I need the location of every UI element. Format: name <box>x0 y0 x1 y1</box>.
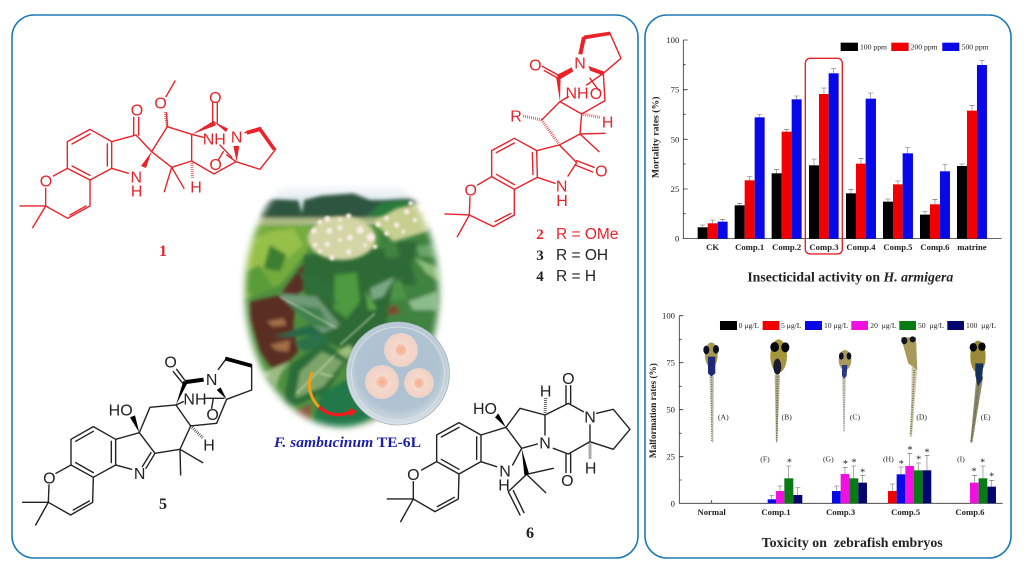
panel letters: (H) <box>883 454 894 463</box>
molecule: compound 6: O <box>561 473 574 490</box>
molecule: compound 5: H <box>203 438 215 455</box>
molecule: compounds 2 to 4: O <box>529 58 542 75</box>
bars: 100 ppm <box>698 165 967 239</box>
caption: strain name: F. sambucinum TE-6L <box>273 435 421 451</box>
significance asterisks: * <box>971 466 976 477</box>
legend: concentrations: 100 ppm <box>860 43 887 52</box>
legend: R group definitions: R = H <box>556 268 596 285</box>
molecule: compounds 2 to 4: H <box>602 115 613 132</box>
molecule: compound 5 <box>23 355 252 525</box>
bars: compound 1 <box>768 478 802 503</box>
category labels: Comp.3 <box>826 507 856 517</box>
embryo A <box>703 342 719 443</box>
y tick labels: 50 <box>666 405 675 415</box>
panel letters: (G) <box>823 454 834 463</box>
molecule: compounds 2 to 4 <box>445 32 621 237</box>
molecule: compound 1: N <box>131 169 142 186</box>
y tick labels <box>666 35 679 244</box>
molecule: compound 1: O <box>40 173 52 190</box>
legend: concentrations: 5 μg/L <box>781 321 802 330</box>
photo: tobacco field oval <box>233 185 453 438</box>
embryo E <box>970 341 986 443</box>
molecule: compound 1: H <box>131 184 142 201</box>
y tick labels: 75 <box>671 85 679 95</box>
molecule: compound 1: N <box>231 129 242 146</box>
significance asterisks <box>787 445 994 483</box>
legend: concentrations <box>841 43 989 52</box>
panel letters: (I) <box>957 454 965 463</box>
category labels: Normal <box>697 507 726 517</box>
category labels: Comp.6 <box>920 242 950 252</box>
molecule: compound 6: HO <box>473 401 497 418</box>
leaf veins <box>280 297 375 393</box>
molecule: compound 1: O <box>209 157 222 174</box>
chart title: Insecticidal activity on H. armigera <box>747 270 953 285</box>
y tick labels: 25 <box>671 184 679 194</box>
category labels: Comp.2 <box>772 242 801 252</box>
significance asterisks: * <box>851 457 856 468</box>
label: compound 6: 6 <box>526 525 534 542</box>
panel letters: (F) <box>760 454 770 463</box>
y tick labels: 0 <box>675 234 679 244</box>
axes and y ticks <box>679 316 1003 503</box>
zebrafish embryo images <box>703 336 986 443</box>
legend: R group definitions: R = OH <box>556 247 608 264</box>
molecule: compounds 2 to 4: R <box>510 109 522 126</box>
y tick labels: 0 <box>671 498 675 508</box>
molecule: compound 1: H <box>190 180 202 197</box>
molecule: compound 5: O <box>43 470 56 487</box>
category labels <box>706 242 987 252</box>
legend: R group definitions: 4 <box>536 269 544 285</box>
legend: R group definitions: R = OMe <box>556 226 618 243</box>
molecule: compound 6: N <box>499 464 511 481</box>
bars: compound 5 <box>888 466 931 503</box>
chart title: Toxicity on zebrafish embryos <box>762 536 943 551</box>
molecule: compound 6: O <box>562 371 575 388</box>
category labels <box>697 507 985 517</box>
molecule: compound 1: NH <box>203 132 226 149</box>
category labels: Comp.3 <box>809 242 839 252</box>
category labels: Comp.1 <box>735 242 764 252</box>
significance asterisks: * <box>899 459 904 470</box>
label: compound 5: 5 <box>159 496 167 513</box>
molecule: compound 5: O <box>164 355 177 372</box>
legend: concentrations: 0 μg/L <box>739 321 759 330</box>
significance asterisks: * <box>989 472 994 483</box>
molecule: compound 5: N <box>206 372 217 389</box>
legend: concentrations: 50 μg/L <box>918 321 945 330</box>
highlight box: compound 3 <box>805 58 842 254</box>
significance asterisks: * <box>860 467 865 478</box>
legend: R group definitions <box>536 226 618 285</box>
molecule: compound 1: O <box>154 95 167 112</box>
molecule: compound 1 <box>20 81 276 228</box>
legend: concentrations: 100 μg/L <box>966 321 996 330</box>
molecule: compound 5: N <box>134 466 145 483</box>
molecule: compound 1: O <box>209 90 222 107</box>
significance asterisks: * <box>843 459 848 470</box>
panel: bioactivity charts <box>645 15 1011 558</box>
molecule: compound 6: H <box>585 460 596 477</box>
panel letters <box>718 412 991 463</box>
flower specks <box>311 201 429 260</box>
legend: concentrations <box>720 321 996 330</box>
panel letters: (A) <box>718 412 729 421</box>
bars: 200 ppm <box>708 94 977 239</box>
panel letters: (E) <box>981 412 991 421</box>
molecule: compound 6 <box>387 371 630 522</box>
panel letters: (C) <box>850 412 861 421</box>
significance asterisks: * <box>787 457 792 468</box>
y axis title: Mortality rates (%) <box>650 96 661 178</box>
y tick labels: 25 <box>666 452 675 462</box>
molecule: compounds 2 to 4: O <box>595 164 608 181</box>
legend: concentrations: 20 μg/L <box>870 321 897 330</box>
category labels: Comp.5 <box>891 507 921 517</box>
embryo C <box>839 350 851 432</box>
legend: R group definitions: 2 <box>536 227 544 243</box>
error bars <box>700 60 985 227</box>
label: compound 1: 1 <box>159 243 167 260</box>
molecule: compound 6: H <box>540 384 551 401</box>
photo: petri dish with three colonies <box>346 322 450 425</box>
category labels: matrine <box>957 242 987 252</box>
legend: R group definitions: 3 <box>536 248 544 264</box>
axes and y ticks <box>683 40 1002 239</box>
molecule: compounds 2 to 4: O <box>464 183 477 200</box>
significance asterisks: * <box>907 445 912 456</box>
category labels: Comp.5 <box>883 242 913 252</box>
panel: compounds and source organism <box>12 15 638 558</box>
molecule: compound 1: O <box>131 102 143 119</box>
embryo B <box>770 339 789 443</box>
bars: compound 6 <box>970 478 996 503</box>
legend: concentrations: 500 ppm <box>962 43 989 52</box>
arrow: from plant to fungal culture <box>309 373 357 417</box>
molecule: compound 6: N <box>539 436 551 453</box>
legend: concentrations: 200 ppm <box>911 43 938 52</box>
legend: concentrations: 10 μg/L <box>824 321 849 330</box>
molecule: compounds 2 to 4: N <box>574 55 586 72</box>
y tick labels: 100 <box>662 311 675 321</box>
significance asterisks: * <box>980 457 985 468</box>
bars: 500 ppm <box>718 65 987 239</box>
chart: zebrafish malformation bars <box>648 311 1003 551</box>
embryo D <box>901 336 917 437</box>
category labels: CK <box>706 242 719 252</box>
error bars <box>769 453 994 499</box>
molecule: compound 5: HO <box>109 402 133 419</box>
molecule: compound 5: NH <box>183 391 207 408</box>
significance asterisks: * <box>924 447 929 458</box>
panel letters: (B) <box>782 412 792 421</box>
y tick labels <box>662 311 675 508</box>
molecule: compound 6: N <box>584 410 596 427</box>
category labels: Comp.6 <box>955 507 985 517</box>
molecule: compound 6: H <box>498 478 510 495</box>
y tick labels: 50 <box>671 134 679 144</box>
molecule: compound 6: O <box>407 467 420 484</box>
molecule: compounds 2 to 4: N <box>556 178 567 195</box>
category labels: Comp.4 <box>846 242 876 252</box>
molecule: compounds 2 to 4: H <box>556 193 568 210</box>
y axis title: Malformation rates (%) <box>648 363 659 458</box>
significance asterisks: * <box>916 455 921 466</box>
y tick labels: 75 <box>666 358 675 368</box>
molecule: compounds 2 to 4: NH <box>565 86 589 103</box>
category labels: Comp.1 <box>761 507 791 517</box>
bars: compound 3 <box>832 474 867 503</box>
panel letters: (D) <box>916 412 927 421</box>
molecule: compound 5: O <box>206 407 219 424</box>
chart: insecticidal mortality bars <box>650 35 1002 285</box>
y tick labels: 100 <box>666 35 679 45</box>
molecule: compounds 2 to 4: O <box>590 86 602 103</box>
